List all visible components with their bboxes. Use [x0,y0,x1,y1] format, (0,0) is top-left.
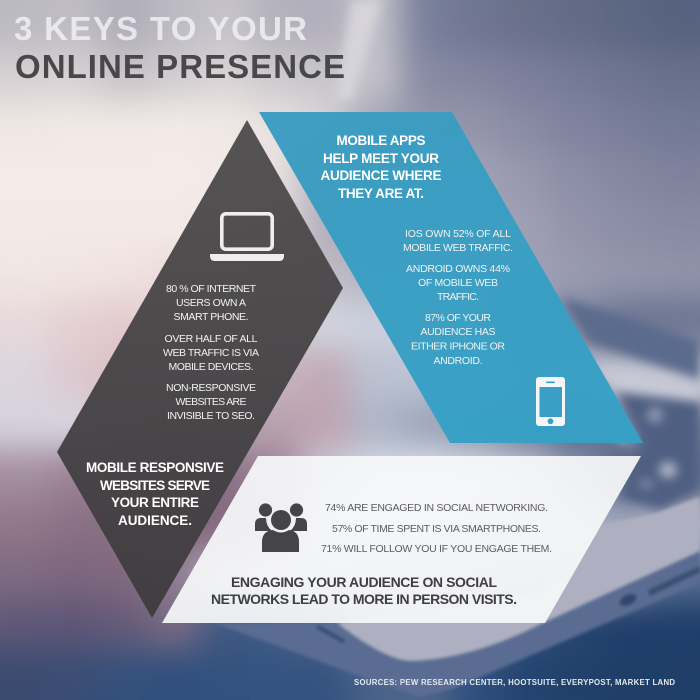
heading: mobile responsive [86,460,224,528]
sources: SOURCES: PEW RESEARCH CENTER, HOOTSUITE, EVERYPOST, MARKET LAND [354,678,675,687]
text: social stats: 74% ARE ENGAGED IN SOCIAL NETWORKING. [325,502,548,514]
heading: mobile apps [320,133,442,201]
text: mobile app stats: ANDROID OWNS 44% [406,263,510,275]
panel: mobile responsive websites [57,120,343,618]
text: social stats [321,502,552,555]
text: mobile app stats: AUDIENCE HAS [420,326,496,338]
text: responsive stats: INVISIBLE TO SEO. [167,410,255,422]
text: mobile app stats: TRAFFIC. [437,291,479,303]
heading: engaging your audience: ENGAGING YOUR AUDIENCE ON SOCIAL [231,574,497,590]
heading: mobile responsive: AUDIENCE. [118,513,192,528]
heading: engaging your audience: NETWORKS LEAD TO MORE IN PERSON VISITS. [211,591,517,607]
heading: mobile apps: HELP MEET YOUR [323,151,439,166]
icon: smartphone [536,377,565,426]
text: mobile app stats: EITHER IPHONE OR [411,340,505,352]
title: ONLINE PRESENCE [15,48,345,85]
text: responsive stats: 80 % OF INTERNET [166,283,257,295]
text: responsive stats: OVER HALF OF ALL [164,333,258,345]
text: mobile app stats: 87% OF YOUR [425,312,491,324]
text: responsive stats: WEBSITES ARE [176,396,246,408]
heading: mobile apps: THEY ARE AT. [338,186,424,201]
panel: mobile apps [259,112,643,443]
heading: mobile apps: AUDIENCE WHERE [320,168,442,183]
heading: mobile responsive: YOUR ENTIRE [111,495,199,510]
text: social stats: 71% WILL FOLLOW YOU IF YOU ENGAGE THEM. [321,543,552,555]
heading: engaging your audience [211,574,517,607]
text: mobile app stats [403,228,513,367]
icon: laptop [210,214,284,261]
panel: social networks [162,456,641,623]
text: mobile app stats: ANDROID. [434,355,482,367]
text: mobile app stats: MOBILE WEB TRAFFIC. [403,242,513,254]
text: social stats: 57% OF TIME SPENT IS VIA SMARTPHONES. [332,523,541,535]
text: responsive stats: MOBILE DEVICES. [168,361,254,373]
text: responsive stats [163,283,259,422]
icon: audience group [255,503,307,552]
text: mobile app stats: OF MOBILE WEB [418,277,498,289]
text: responsive stats: WEB TRAFFIC IS VIA [163,347,259,359]
text: mobile app stats: IOS OWN 52% OF ALL [405,228,511,240]
title [14,10,345,85]
text: responsive stats: USERS OWN A [176,297,246,309]
title: 3 KEYS TO YOUR [14,10,307,47]
heading: mobile responsive: WEBSITES SERVE [100,478,210,493]
text: responsive stats: SMART PHONE. [174,311,248,323]
heading: mobile responsive: MOBILE RESPONSIVE [86,460,224,475]
heading: mobile apps: MOBILE APPS [336,133,426,148]
text: responsive stats: NON-RESPONSIVE [166,382,256,394]
